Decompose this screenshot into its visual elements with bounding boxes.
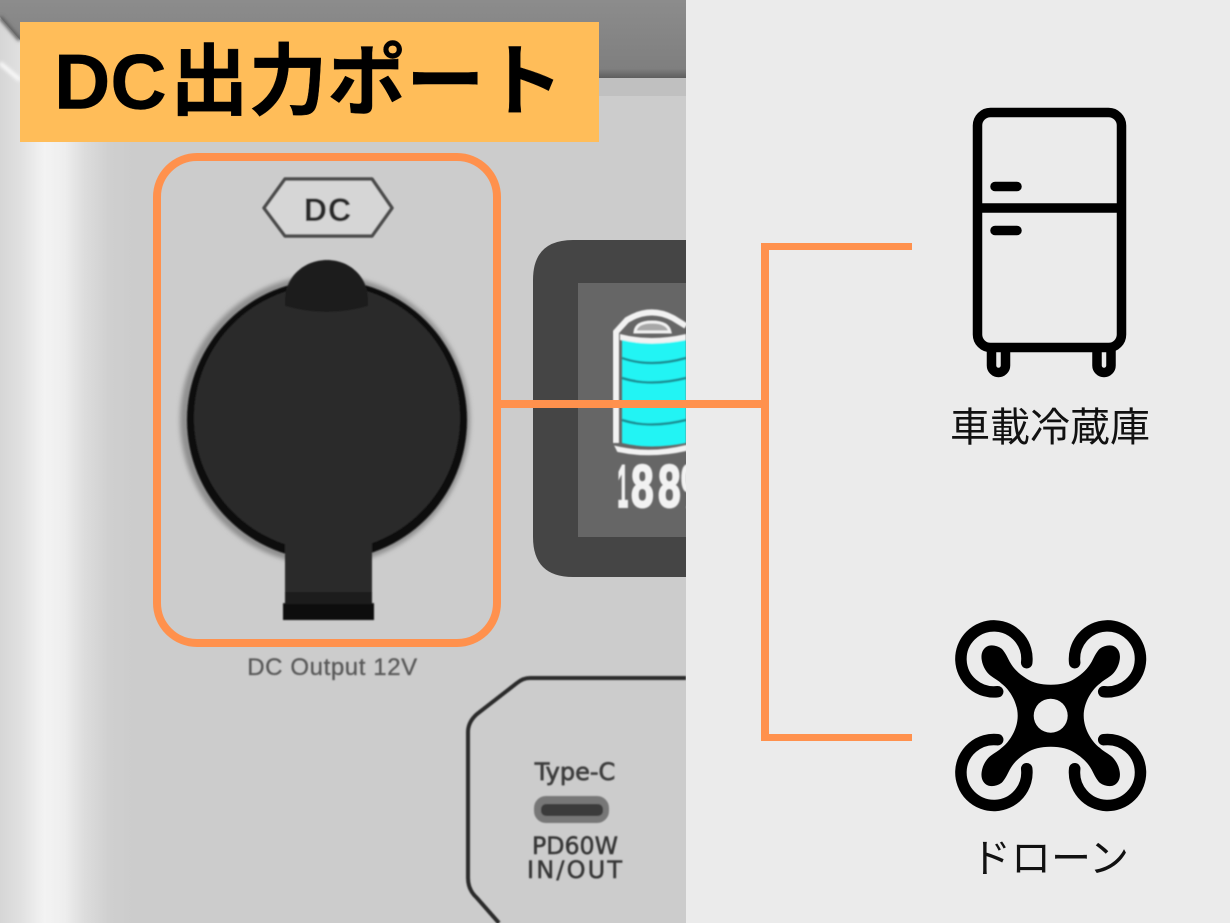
text: PD60W IN/OUT [527,832,622,884]
text: car refrigerator: 車載冷蔵庫 [950,406,1150,450]
text: PD60W IN/OUT: IN/OUT [527,856,622,884]
label: DC hexagon badge [264,179,392,236]
title banner: 出力ポート [170,38,563,126]
Type-C port panel [468,678,686,923]
battery percentage digits: 1 [618,454,628,520]
label: DC hexagon badge: DC [304,192,352,228]
battery percentage digits [618,453,714,520]
battery percentage digits: 8 [631,453,654,520]
panel: right background [686,0,1230,923]
title banner [20,22,599,142]
text: DC Output 12V: DC Output 12V [247,654,418,681]
battery percentage digits: 8 [658,453,681,520]
icon: refrigerator [978,112,1122,372]
text: drone: ドローン [971,837,1129,881]
highlight frame around DC port [157,157,497,643]
text: Type-C: Type-C [534,758,615,786]
icon: drone [961,626,1140,805]
DC socket rubber cap [180,260,470,620]
USB-C port [534,796,609,823]
connector lines [498,243,912,741]
panel: product photo [0,0,714,923]
battery percentage digits: % [681,453,714,520]
battery indicator [616,312,686,454]
text: PD60W IN/OUT: PD60W [532,832,618,860]
title banner: DC [54,38,167,126]
LCD display [533,240,714,577]
